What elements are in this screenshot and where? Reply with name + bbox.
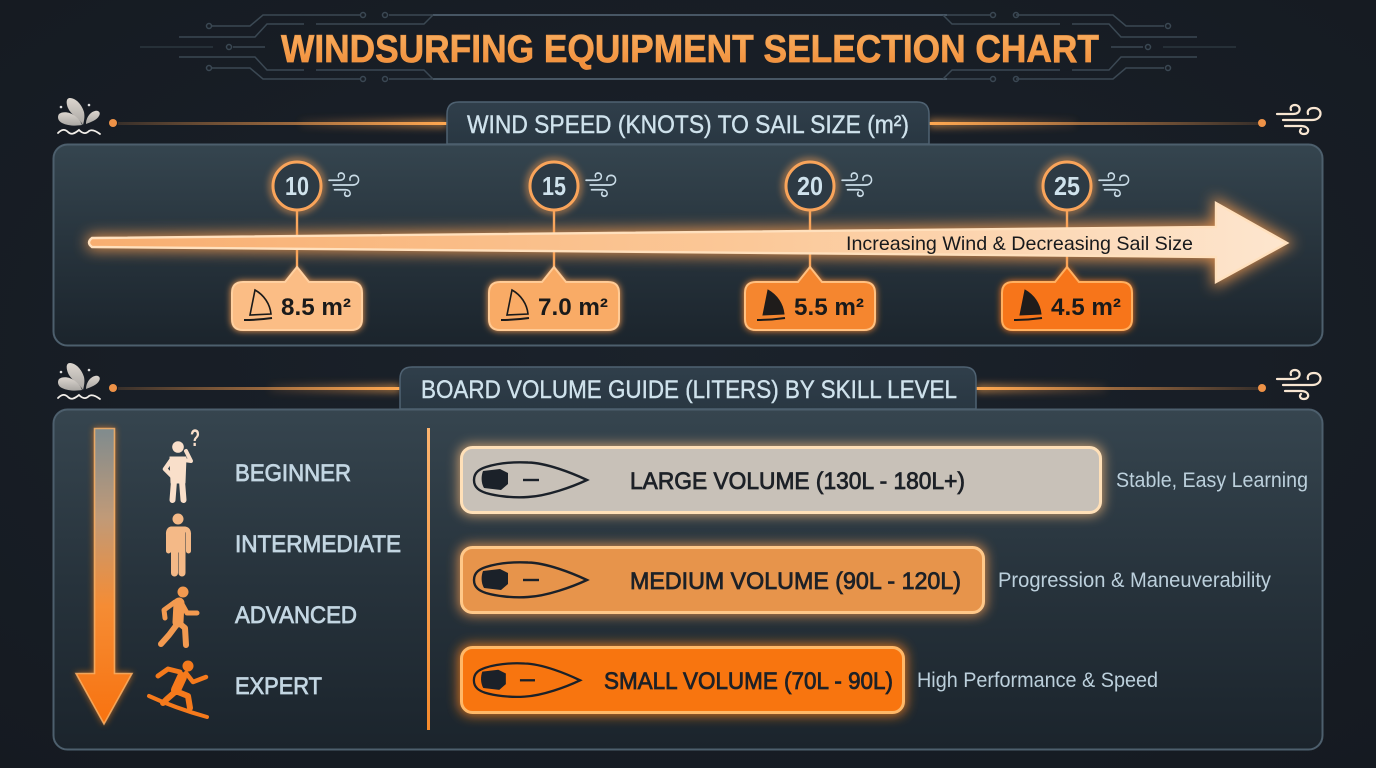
sail label 7.0: 7.0 m² (538, 294, 608, 321)
marker 20 knots (785, 161, 872, 211)
panel: board volume (54, 410, 1322, 750)
note: large: Stable, Easy Learning (1116, 469, 1308, 492)
bar: medium volume: MEDIUM VOLUME (90L - 120L) (630, 568, 961, 595)
marker 15 knots: 15 (542, 171, 566, 201)
icon: intermediate (168, 514, 189, 573)
sail label 8.5 (231, 266, 363, 331)
label: intermediate: INTERMEDIATE (235, 531, 401, 558)
arrow label: Increasing Wind & Decreasing Sail Size (846, 233, 1193, 255)
marker 25 knots (1042, 161, 1129, 211)
section header: board volume (58, 363, 1321, 409)
skill progression arrow (75, 428, 133, 725)
icon: beginner: ? (190, 425, 200, 452)
sail label 5.5: 5.5 m² (794, 294, 864, 321)
icon: wind (1277, 370, 1321, 399)
heading tab (447, 102, 929, 144)
icon: water splash (58, 363, 100, 399)
bar: small volume: SMALL VOLUME (70L - 90L) (604, 668, 893, 695)
dot right (1258, 384, 1266, 392)
rule left (118, 122, 447, 125)
rule glow right (976, 385, 1106, 392)
panel background (54, 144, 1322, 346)
marker 10 knots: 10 (285, 171, 309, 201)
rule right (976, 387, 1258, 390)
dot right (1258, 119, 1266, 127)
rule glow right (929, 120, 1076, 127)
marker 25 knots: 25 (1054, 171, 1080, 201)
bar: large volume: LARGE VOLUME (130L - 180L+) (630, 468, 965, 495)
dot left (109, 119, 117, 127)
label: expert: EXPERT (235, 673, 322, 700)
panel: wind to sail (54, 144, 1322, 346)
dot left (109, 384, 117, 392)
rule glow left (270, 385, 400, 392)
marker 15 knots (529, 161, 616, 211)
main arrow (89, 202, 1288, 283)
title: WINDSURFING EQUIPMENT SELECTION CHART (281, 28, 1099, 71)
heading text: WIND SPEED (KNOTS) TO SAIL SIZE (m²) (467, 111, 909, 139)
rule right (929, 122, 1258, 125)
icon: water splash (58, 98, 100, 134)
section header: wind speed (58, 98, 1321, 144)
heading text: BOARD VOLUME GUIDE (LITERS) BY SKILL LEVEL (421, 376, 957, 404)
circuit decoration (140, 12, 1236, 82)
bar: small volume (459, 645, 906, 715)
marker 10 knots (272, 161, 359, 211)
panel background (54, 410, 1322, 750)
title (140, 12, 1236, 82)
stems (297, 210, 1067, 270)
sail label 7.0 (488, 266, 620, 331)
icon: expert (149, 660, 207, 717)
icon: wind (1277, 105, 1321, 134)
sail label 4.5: 4.5 m² (1051, 294, 1121, 321)
icon: beginner (165, 425, 200, 500)
heading tab (400, 367, 976, 409)
bar: medium volume (459, 545, 986, 615)
rule glow left (300, 120, 447, 127)
bar: large volume (459, 445, 1103, 515)
marker 20 knots: 20 (797, 171, 823, 201)
note: small: High Performance & Speed (917, 669, 1158, 692)
sail label 8.5: 8.5 m² (281, 294, 351, 321)
note: medium: Progression & Maneuverability (998, 569, 1271, 592)
label: beginner: BEGINNER (235, 460, 351, 487)
sail label 4.5 (1001, 266, 1133, 331)
rule left (118, 387, 400, 390)
divider (427, 428, 430, 730)
label: advanced: ADVANCED (235, 602, 357, 629)
sail label 5.5 (744, 266, 876, 331)
icon: advanced (161, 586, 197, 645)
